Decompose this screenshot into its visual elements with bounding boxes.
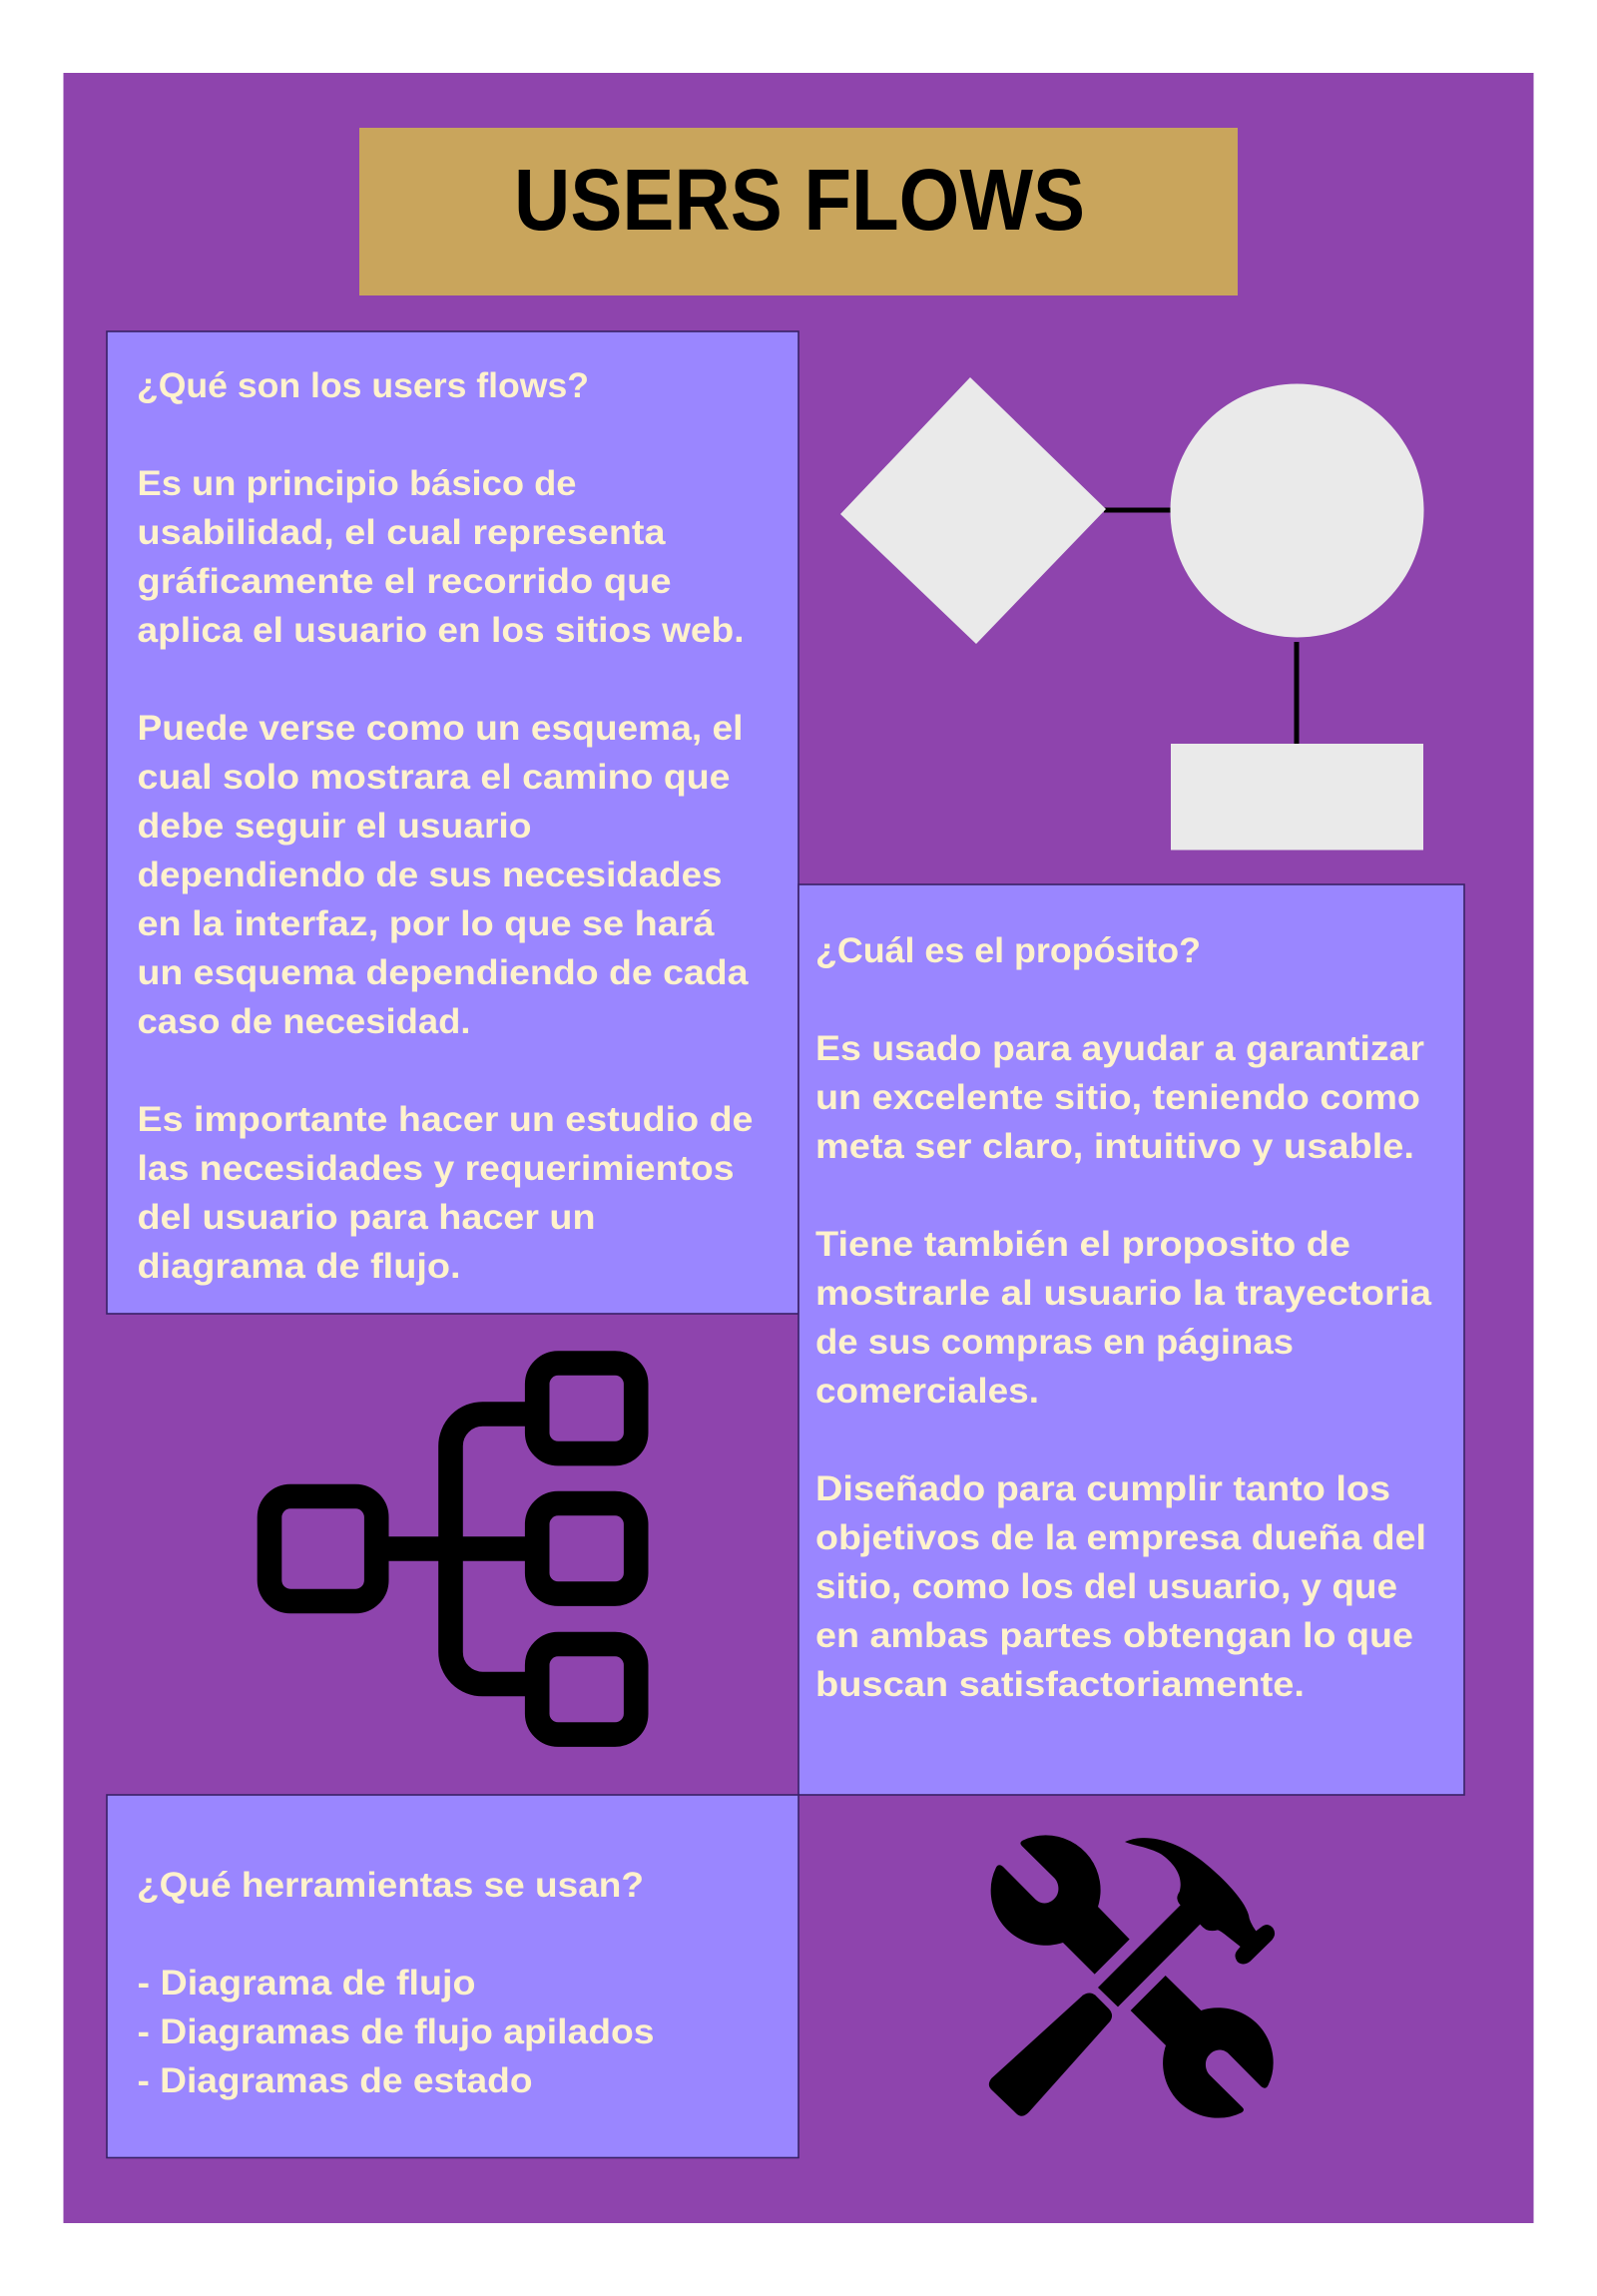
icon: crossed hammer and wrench xyxy=(989,1835,1275,2118)
heading: what are users flows: ¿Qué son los users flows? xyxy=(137,366,589,405)
text block: goal: un excelente sitio, teniendo como xyxy=(815,1078,1420,1117)
text block: user study: del usuario para hacer un xyxy=(138,1198,595,1237)
title banner: USERS FLOWS xyxy=(514,152,1085,249)
text block: trajectory: comerciales. xyxy=(815,1372,1039,1411)
text block: definition: aplica el usuario en los sitios web. xyxy=(138,611,745,650)
wrench xyxy=(991,1835,1274,2118)
text block: objectives: objetivos de la empresa dueña del xyxy=(815,1518,1426,1557)
title banner xyxy=(359,128,1238,295)
text block: goal: Es usado para ayudar a garantizar xyxy=(815,1029,1424,1068)
text block: schema: dependiendo de sus necesidades xyxy=(138,856,723,894)
text block: schema: en la interfaz, por lo que se hará xyxy=(138,904,715,943)
shape: rectangle xyxy=(1171,744,1423,851)
text block: trajectory: de sus compras en páginas xyxy=(815,1323,1294,1362)
text block: definition: usabilidad, el cual representa xyxy=(138,513,666,552)
text block: objectives: en ambas partes obtengan lo que xyxy=(815,1616,1413,1655)
shape: diamond xyxy=(840,377,1106,644)
text block: user study: diagrama de flujo. xyxy=(138,1247,461,1286)
panel: tools xyxy=(107,1795,798,2158)
text block: goal: meta ser claro, intuitivo y usable. xyxy=(815,1127,1414,1166)
text block: trajectory: Tiene también el proposito de xyxy=(815,1225,1350,1264)
text block: trajectory: mostrarle al usuario la trayectoria xyxy=(815,1274,1432,1313)
text block: user study xyxy=(138,1100,754,1286)
heading: purpose: ¿Cuál es el propósito? xyxy=(815,931,1201,970)
text block: objectives: sitio, como los del usuario, y que xyxy=(815,1567,1397,1606)
text block: definition: gráficamente el recorrido que xyxy=(138,562,671,601)
text block: user study: Es importante hacer un estudio de xyxy=(138,1100,754,1139)
text block: schema: cual solo mostrara el camino que xyxy=(138,758,731,797)
text block: definition xyxy=(138,464,745,650)
connector: diamond to circle xyxy=(1104,507,1173,513)
list: tools: - Diagrama de flujo xyxy=(138,1964,475,2003)
connector: circle to rectangle xyxy=(1294,642,1300,746)
text block: definition: Es un principio básico de xyxy=(138,464,577,503)
text block: schema: caso de necesidad. xyxy=(138,1002,470,1041)
shape: circle xyxy=(1170,383,1423,637)
list: tools: - Diagramas de estado xyxy=(138,2061,533,2100)
list: tools xyxy=(138,1964,655,2100)
text block: objectives xyxy=(815,1469,1426,1704)
hammer xyxy=(989,1838,1275,2116)
text block: objectives: buscan satisfactoriamente. xyxy=(815,1665,1305,1704)
icon: hierarchy tree xyxy=(269,1364,636,1735)
panel: purpose xyxy=(798,884,1464,1795)
panel: what are users flows xyxy=(107,331,798,1314)
text block: schema: debe seguir el usuario xyxy=(138,807,531,846)
diagram: flowchart shapes xyxy=(840,377,1423,851)
text block: trajectory xyxy=(815,1225,1432,1411)
text block: schema: Puede verse como un esquema, el xyxy=(138,709,743,748)
list: tools: - Diagramas de flujo apilados xyxy=(138,2012,655,2051)
text block: schema: un esquema dependiendo de cada xyxy=(138,953,749,992)
text block: user study: las necesidades y requerimientos xyxy=(138,1149,735,1188)
heading: tools: ¿Qué herramientas se usan? xyxy=(137,1866,644,1905)
text block: schema xyxy=(138,709,749,1041)
text block: goal xyxy=(815,1029,1424,1166)
text block: objectives: Diseñado para cumplir tanto los xyxy=(815,1469,1390,1508)
